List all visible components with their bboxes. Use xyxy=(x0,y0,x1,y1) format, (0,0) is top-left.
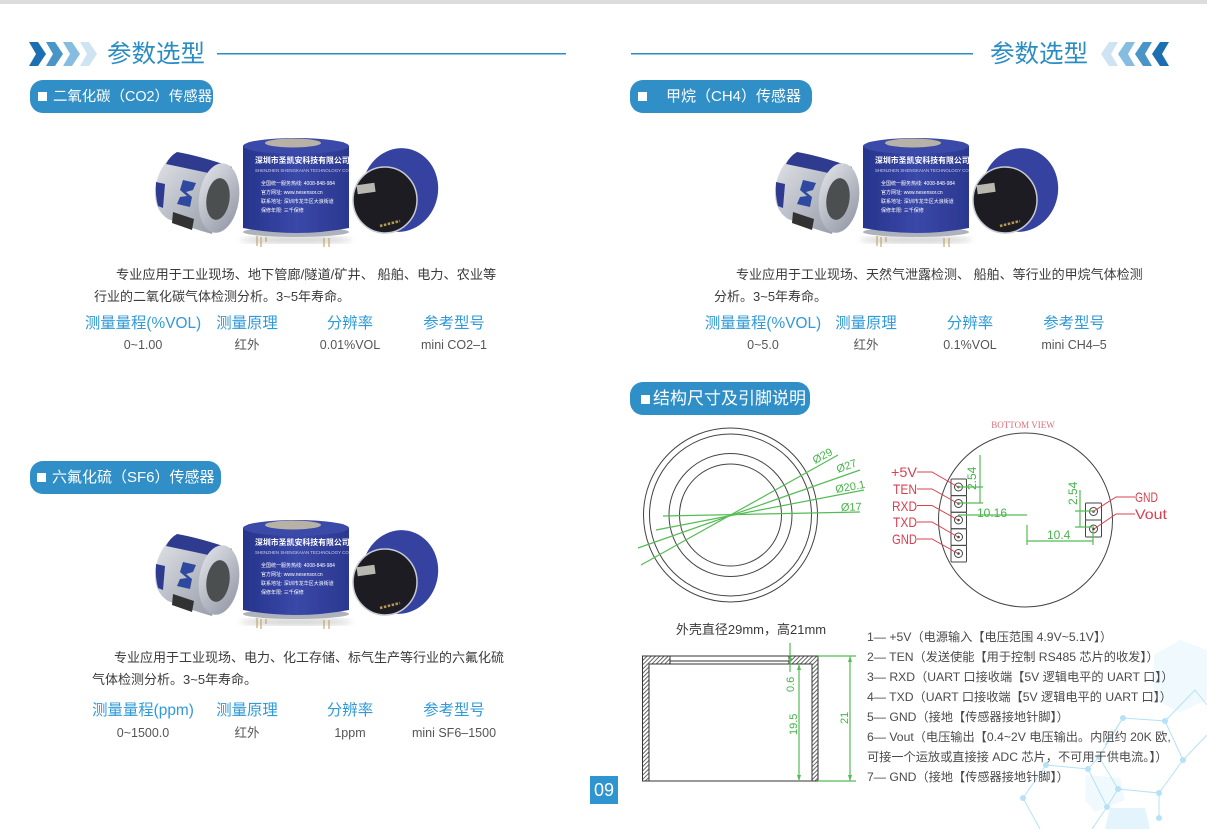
structure heading pill: 结构尺寸及引脚说明 xyxy=(653,389,806,408)
SF6 parameter table: 测量量程(ppm) xyxy=(92,701,194,719)
bottom view pin drawing: GND xyxy=(1135,489,1158,505)
CH4 parameter table: 参考型号 xyxy=(1043,314,1105,332)
CH4 description: 专业应用于工业现场、天然气泄露检测、 船舶、等行业的甲烷气体检测 xyxy=(736,267,1143,282)
CH4 sensor photo: 官方网址: www.nesensor.cn xyxy=(881,189,943,196)
CH4 parameter table: 0~5.0 xyxy=(747,338,779,352)
housing size caption: 外壳直径29mm，高21mm xyxy=(676,622,826,637)
CO2 parameter table: 测量量程(%VOL) xyxy=(85,314,201,332)
CO2 sensor photo: SHENZHEN SHENGKAIAN TECHNOLOGY CO. xyxy=(255,168,350,173)
CH4 parameter table: 测量量程(%VOL) xyxy=(705,314,821,332)
bottom view pin drawing: +5V xyxy=(891,464,918,480)
structure heading pill xyxy=(630,382,810,415)
bottom view pin drawing: BOTTOM VIEW xyxy=(991,420,1055,430)
bottom view pin drawing: TEN xyxy=(893,481,917,497)
bottom view pin drawing: 10.16 xyxy=(977,506,1007,520)
SF6 sensor photo: 深圳市圣凯安科技有限公司 xyxy=(255,537,350,547)
SF6 parameter table: 1ppm xyxy=(334,726,366,740)
left section heading xyxy=(29,40,566,68)
top view dimension drawing: Ø17 xyxy=(841,501,862,514)
side section drawing xyxy=(642,643,856,781)
SF6 parameter table: 测量原理 xyxy=(216,701,278,719)
side section drawing: 0.6 xyxy=(785,677,797,692)
CH4 heading pill: 甲烷（CH4）传感器 xyxy=(666,88,801,105)
panel: CH4 sensor xyxy=(630,80,1143,352)
top view dimension drawing: Ø29 xyxy=(811,446,835,467)
CH4 parameter table xyxy=(705,314,1107,352)
CH4 sensor photo xyxy=(775,138,1066,247)
CO2 parameter table: 分辨率 xyxy=(327,314,373,332)
bottom view pin drawing: 2.54 xyxy=(965,466,979,490)
SF6 sensor photo: 全国统一服务热线: 4008-848-984 xyxy=(261,562,335,569)
SF6 parameter table xyxy=(92,701,496,740)
CH4 parameter table: 分辨率 xyxy=(947,314,993,332)
CO2 sensor photo: 联系地址: 深圳市龙华区大浪街道 xyxy=(261,198,334,205)
pin list: 6— Vout（电压输出【0.4~2V 电压输出。内阻约 20K 欧, xyxy=(867,729,1171,744)
page number: 09 xyxy=(594,780,614,800)
pin list: 2— TEN（发送使能【用于控制 RS485 芯片的收发】） xyxy=(867,649,1159,664)
top view dimension drawing: Ø20.1 xyxy=(834,479,866,496)
SF6 parameter table: 红外 xyxy=(234,725,260,740)
bottom view pin drawing: Vout xyxy=(1135,506,1167,522)
SF6 parameter table: mini SF6–1500 xyxy=(412,726,496,740)
CH4 sensor photo: 联系地址: 深圳市龙华区大浪街道 xyxy=(881,198,954,205)
CO2 description xyxy=(94,266,496,304)
CO2 sensor photo: 官方网址: www.nesensor.cn xyxy=(261,189,323,196)
side section drawing: 21 xyxy=(839,712,851,724)
right section heading: 参数选型 xyxy=(990,40,1088,68)
CO2 heading pill: 二氧化碳（CO2）传感器 xyxy=(53,88,212,105)
CH4 description xyxy=(714,267,1143,304)
SF6 sensor photo: 联系地址: 深圳市龙华区大浪街道 xyxy=(261,580,334,587)
side section drawing: 19.5 xyxy=(788,714,800,735)
CH4 sensor photo: 全国统一服务热线: 4008-848-984 xyxy=(881,180,955,187)
SF6 parameter table: 分辨率 xyxy=(327,701,373,719)
page number xyxy=(590,776,618,804)
top view dimension drawing: Ø27 xyxy=(835,457,859,476)
CH4 sensor photo: 保修年限: 三千保修 xyxy=(881,207,924,214)
panel: SF6 sensor xyxy=(30,461,504,740)
CO2 parameter table: 参考型号 xyxy=(423,314,485,332)
CO2 description: 专业应用于工业现场、地下管廊/隧道/矿井、 船舶、电力、农业等 xyxy=(116,266,496,282)
background hexagon network xyxy=(1020,640,1207,829)
pin list: 4— TXD（UART 口接收端【5V 逻辑电平的 UART 口】） xyxy=(867,689,1172,704)
CO2 sensor photo: 全国统一服务热线: 4008-848-984 xyxy=(261,180,335,187)
SF6 description xyxy=(92,650,504,687)
SF6 heading pill xyxy=(30,461,221,494)
CO2 parameter table: 测量原理 xyxy=(216,314,278,332)
bottom view pin drawing: RXD xyxy=(892,498,917,514)
top grey bar xyxy=(0,0,1207,4)
CH4 sensor photo: 深圳市圣凯安科技有限公司 xyxy=(875,155,970,165)
panel: structure and pins xyxy=(630,382,1174,784)
CO2 heading pill xyxy=(30,80,213,113)
CH4 heading pill xyxy=(630,80,812,113)
CO2 sensor photo: 保修年限: 三千保修 xyxy=(261,207,304,214)
right section heading xyxy=(631,40,1169,68)
CH4 parameter table: mini CH4–5 xyxy=(1041,338,1107,352)
CO2 parameter table xyxy=(85,314,487,352)
SF6 parameter table: 0~1500.0 xyxy=(117,726,169,740)
CO2 parameter table: 红外 xyxy=(234,337,260,352)
CO2 parameter table: 0.01%VOL xyxy=(320,338,380,352)
CH4 parameter table: 红外 xyxy=(853,337,879,352)
SF6 parameter table: 参考型号 xyxy=(423,701,485,719)
CH4 parameter table: 测量原理 xyxy=(835,314,897,332)
pin list: 7— GND（接地【传感器接地针脚】） xyxy=(867,769,1069,784)
CO2 sensor photo: 深圳市圣凯安科技有限公司 xyxy=(255,155,350,165)
CH4 parameter table: 0.1%VOL xyxy=(943,338,997,352)
CH4 description: 分析。3~5年寿命。 xyxy=(714,289,827,304)
pin list: 5— GND（接地【传感器接地针脚】） xyxy=(867,709,1069,724)
SF6 sensor photo: 保修年限: 三千保修 xyxy=(261,589,304,596)
top view dimension drawing xyxy=(638,428,866,602)
bottom view pin drawing: TXD xyxy=(893,514,917,530)
pin list xyxy=(867,629,1174,784)
left section heading: 参数选型 xyxy=(107,40,205,68)
bottom view pin drawing: GND xyxy=(892,531,917,547)
CO2 sensor photo xyxy=(155,138,446,247)
SF6 description: 专业应用于工业现场、电力、化工存储、标气生产等行业的六氟化硫 xyxy=(114,650,504,665)
bottom view pin drawing xyxy=(891,420,1167,607)
SF6 sensor photo: SHENZHEN SHENGKAIAN TECHNOLOGY CO. xyxy=(255,550,350,555)
pin list: 3— RXD（UART 口接收端【5V 逻辑电平的 UART 口】） xyxy=(867,669,1174,684)
SF6 sensor photo xyxy=(155,520,446,629)
CH4 sensor photo: SHENZHEN SHENGKAIAN TECHNOLOGY CO. xyxy=(875,168,970,173)
SF6 sensor photo: 官方网址: www.nesensor.cn xyxy=(261,571,323,578)
CO2 parameter table: 0~1.00 xyxy=(124,338,162,352)
bottom view pin drawing: 2.54 xyxy=(1066,481,1080,505)
SF6 heading pill: 六氟化硫（SF6）传感器 xyxy=(52,469,215,486)
SF6 description: 气体检测分析。3~5年寿命。 xyxy=(92,672,257,687)
pin list: 可接一个运放或直接接 ADC 芯片，不可用于供电流。】） xyxy=(867,749,1168,764)
pin list: 1— +5V（电源输入【电压范围 4.9V~5.1V】） xyxy=(867,629,1112,644)
panel: CO2 sensor xyxy=(30,80,496,352)
CO2 description: 行业的二氧化碳气体检测分析。3~5年寿命。 xyxy=(94,289,350,304)
bottom view pin drawing: 10.4 xyxy=(1047,528,1071,542)
CO2 parameter table: mini CO2–1 xyxy=(421,338,487,352)
